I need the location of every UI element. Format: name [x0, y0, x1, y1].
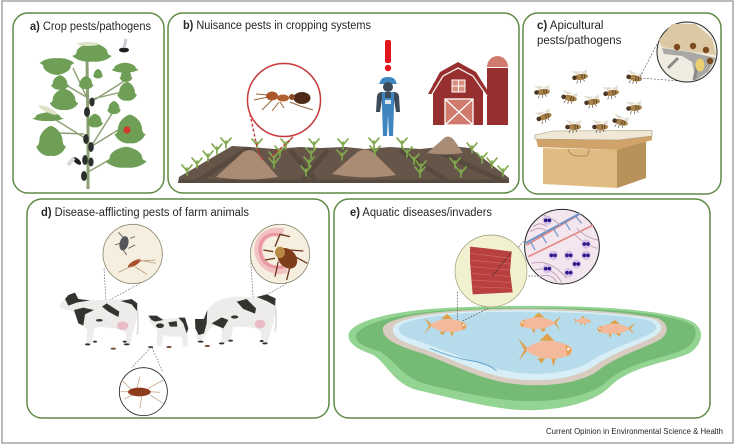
icon: barn and silo: [428, 56, 508, 125]
dotted callout lines: [104, 260, 287, 372]
varroa mite callout: [640, 22, 717, 82]
pond sand rim: [383, 309, 667, 385]
source credit: Current Opinion in Environmental Science & Health: [546, 427, 723, 436]
pond bank dark green: [356, 308, 696, 401]
heading: a: a) Crop pests/pathogens: [30, 21, 151, 33]
mite callout: [119, 368, 167, 416]
pale caterpillars: [77, 42, 99, 46]
panel: c apicultural pests and pathogens: [523, 13, 721, 194]
ant mound centre: [332, 150, 396, 177]
heading: d: d) Disease-afflicting pests of farm animals: [41, 207, 249, 219]
beehive: [535, 130, 652, 188]
honey bees: [533, 69, 643, 133]
wasps: [119, 48, 129, 52]
ant callout: [248, 64, 320, 160]
muscle tissue callout: [455, 235, 527, 307]
parasite tissue callout: [525, 209, 599, 284]
panel: b nuisance pests in cropping systems: [168, 13, 519, 193]
ant mound right: [427, 136, 463, 154]
pond bank light green: [348, 306, 701, 410]
pond water: [399, 312, 656, 374]
calf: [148, 316, 188, 347]
dotted callout lines: [457, 240, 540, 322]
icon: exclamation mark: [385, 40, 391, 71]
panel: a crop pests and pathogens: [13, 13, 164, 193]
ground pests: [111, 345, 210, 350]
pond shallow water: [393, 310, 661, 380]
heading: c: Apicultural: [547, 20, 604, 32]
heading: e: e) Aquatic diseases/invaders: [350, 207, 492, 219]
soil field: [178, 146, 509, 183]
icon: farmer: [376, 77, 400, 136]
plant illustration: [32, 39, 147, 189]
fly and mosquito callout: [103, 224, 162, 284]
cow left: [59, 293, 138, 345]
panel: d disease-afflicting pests of farm animals: [27, 199, 329, 418]
fish group: [424, 313, 635, 367]
crop sprouts: [182, 138, 508, 177]
heading: c: pests/pathogens: [537, 35, 622, 47]
aphids: [81, 98, 95, 181]
icon: ant: [254, 92, 313, 111]
soil furrows: [178, 147, 509, 183]
ant mound left: [216, 150, 278, 180]
ladybug: [123, 126, 131, 134]
tick callout: [250, 224, 310, 284]
cow right: [195, 294, 276, 344]
heading: c: c): [537, 20, 547, 32]
heading: b: b) Nuisance pests in cropping systems: [183, 20, 371, 32]
pond ripple: [430, 348, 497, 371]
panel: e aquatic diseases and invaders: [334, 199, 710, 418]
